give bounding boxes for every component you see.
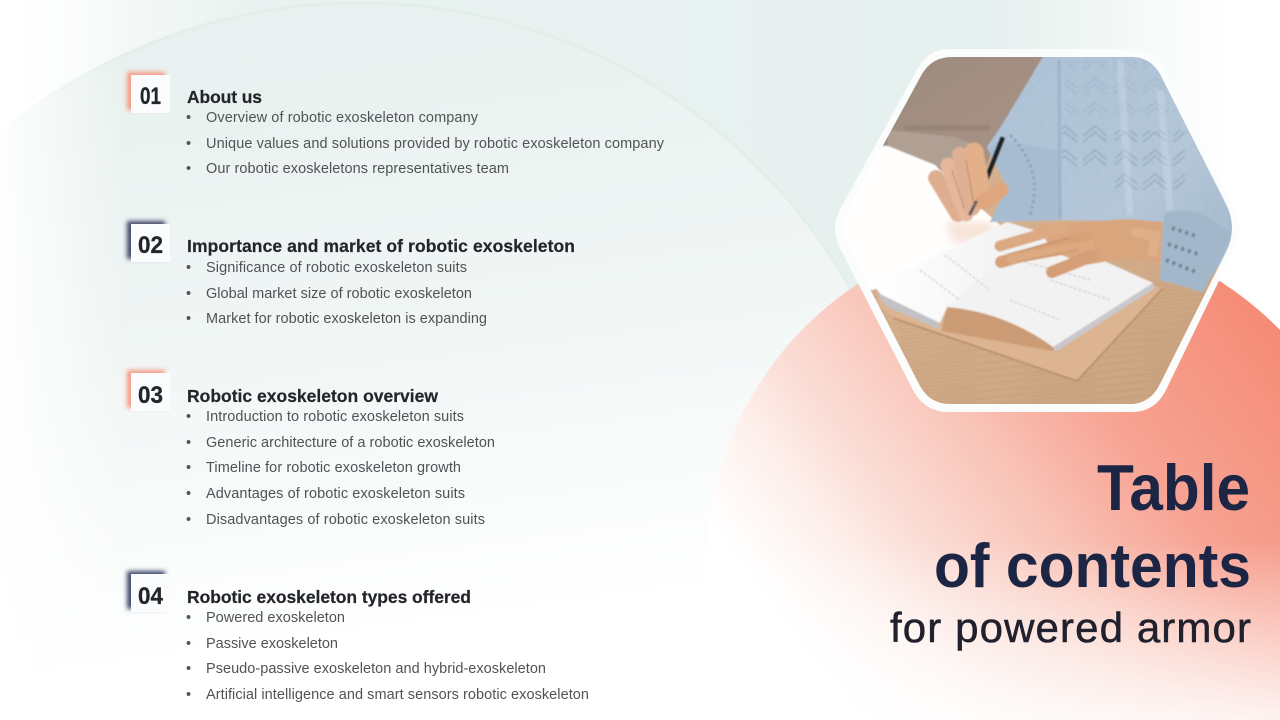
item 3 bullets: Generic architecture of a robotic exoskeleton [206,435,495,451]
title: of contents [934,532,1251,601]
item 4 heading: Robotic exoskeleton types offered [187,587,471,607]
title: for powered armor [890,604,1251,651]
item 2 bullets: • [186,286,191,302]
title [890,451,1251,651]
item 3 bullets: • [186,486,191,502]
photo: sofa [880,55,1050,170]
item 1 bullets: • [186,136,191,152]
item 3 bullets: Timeline for robotic exoskeleton growth [206,460,461,476]
item 3 bullets: • [186,409,191,425]
item 1 bullets: Unique values and solutions provided by robotic exoskeleton company [206,136,665,152]
hexagon photo frame [835,49,1239,412]
item 1 heading: About us [187,87,262,107]
photo: wooden table [936,274,1215,404]
item 2 bullets: Significance of robotic exoskeleton suits [206,260,467,276]
photo: sunlit table top [830,145,1000,290]
item 2 bullets: Global market size of robotic exoskeleton [206,286,472,302]
photo: notebook pages [873,222,1155,352]
item 4 bullets: • [186,661,191,677]
item 4 bullets: Pseudo-passive exoskeleton and hybrid-exoskeleton [206,661,546,677]
coral circle background shape [700,229,1280,720]
item 2 heading: Importance and market of robotic exoskeleton [187,236,575,256]
photo: hand writing in a notebook [870,57,1232,404]
item 2 bullets: • [186,311,191,327]
item 4 bullets: Powered exoskeleton [206,610,345,626]
photo: pen [986,136,1006,180]
large pale circle background shape [0,3,923,720]
photo: blue knit sweater [986,57,1232,292]
item 2 number badge: 02 [138,232,163,259]
item 2 bullets: • [186,260,191,276]
item 2 bullets [186,260,487,327]
photo: resting hand [1000,219,1163,272]
title: Table [1097,451,1250,524]
item 2 bullets: Market for robotic exoskeleton is expanding [206,311,487,327]
item 1 bullets: • [186,161,191,177]
white fade on left edge [0,0,125,720]
item 1 number badge [127,72,170,113]
item 3 bullets: Disadvantages of robotic exoskeleton suits [206,512,485,528]
item 3 bullets: • [186,435,191,451]
photo: writing hand [936,152,1001,215]
item 4 number badge [127,571,170,612]
item 1 bullets: • [186,110,191,126]
item 3 heading: Robotic exoskeleton overview [187,386,438,406]
item 4 bullets: • [186,636,191,652]
item 3 bullets: Introduction to robotic exoskeleton suits [206,409,464,425]
item 1 number badge: 01 [140,83,161,110]
item 4 bullets: Artificial intelligence and smart sensors robotic exoskeleton [206,687,589,703]
photo: notebook cover [878,287,1162,380]
item 3 number badge: 03 [138,382,163,409]
item 4 bullets: • [186,610,191,626]
item 4 bullets [186,610,589,703]
item 4 bullets: Passive exoskeleton [206,636,338,652]
item 1 bullets [186,110,665,177]
item 1 bullets: Overview of robotic exoskeleton company [206,110,479,126]
item 1 bullets: Our robotic exoskeletons representatives team [206,161,509,177]
item 2 number badge [127,221,170,262]
item 3 number badge [127,370,170,411]
item 3 bullets [186,409,495,528]
item 4 bullets: • [186,687,191,703]
item 3 bullets: • [186,460,191,476]
item 3 bullets: • [186,512,191,528]
item 3 bullets: Advantages of robotic exoskeleton suits [206,486,465,502]
item 4 number badge: 04 [138,583,164,610]
